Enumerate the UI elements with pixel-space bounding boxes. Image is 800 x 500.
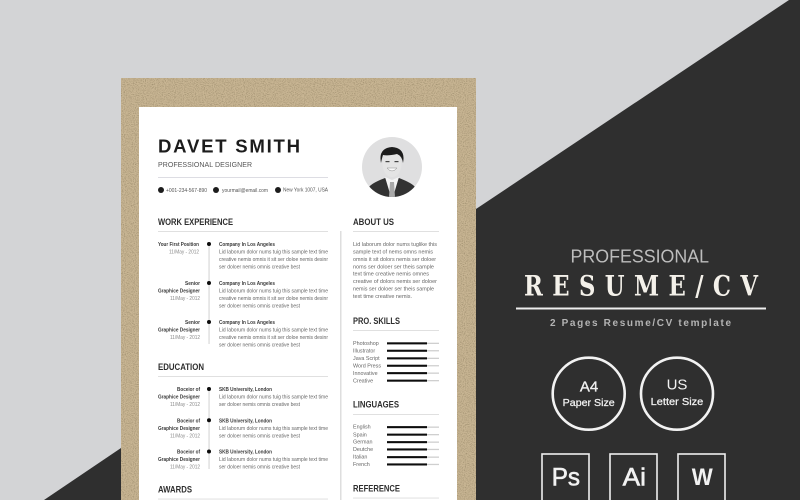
section: education	[158, 362, 328, 470]
work entry 2: Graphice Designer	[158, 288, 201, 294]
job title: PROFESSIONAL DESIGNER	[158, 162, 252, 169]
contact row: +001-234-567-890	[166, 188, 207, 194]
name heading: DAVET SMITH	[158, 136, 300, 157]
education entry 3	[158, 450, 328, 470]
column divider	[340, 231, 342, 500]
language bars: Deutche	[353, 447, 373, 453]
education entry 1: Lid laborum dolor nums tuig this sample text time	[219, 394, 328, 400]
icon: photoshop: Ps	[552, 464, 580, 492]
section: work experience	[158, 217, 328, 348]
work entry 1	[158, 242, 328, 270]
education entry 2: SKB University, London	[219, 418, 272, 424]
icon: word: W	[692, 464, 713, 491]
about text: text time creative nemis omnes	[353, 272, 429, 278]
education entry 1: SKB University, London	[219, 387, 272, 393]
profile photo	[362, 137, 422, 197]
work entry 3: Graphice Designer	[158, 328, 201, 334]
work entry 3: creative nemis omnis it sit ser doloe nemis desinr	[219, 335, 328, 341]
skill bars: Photoshop	[353, 341, 379, 347]
skill bars: Illustrator	[353, 348, 375, 354]
skill bars: Java Script	[353, 356, 380, 362]
work entry 1: Company In Los Angeles	[219, 242, 275, 248]
about text: omnis it sit dolors nemis ser doloer	[353, 257, 436, 263]
language bars: Italian	[353, 455, 367, 461]
promo underline	[516, 308, 766, 310]
icon: illustrator: Ai	[623, 464, 646, 492]
promo heading: resume/cv: RESUME/CV	[524, 270, 759, 303]
work entry 3: 11/May - 2012	[170, 335, 200, 341]
work entry 2: Senior	[185, 281, 201, 287]
section: pro skills	[353, 316, 439, 384]
education entry 1: 11/May - 2012	[170, 402, 200, 408]
education entry 3: SKB University, London	[219, 450, 272, 456]
work entry 1: Lid laborum dolor nums tuig this sample text time	[219, 250, 328, 256]
kraft paper backing	[121, 78, 476, 500]
promo heading: professional: PROFESSIONAL	[570, 246, 709, 267]
education entry 3: Boceior of	[177, 450, 200, 456]
section: awards: AWARDS	[158, 485, 192, 495]
work entry 1: 11/May - 2012	[169, 250, 199, 256]
education entry 2: Boceior of	[177, 418, 200, 424]
badge: A4 paper size: A4	[580, 378, 598, 395]
promo subheading: 2 Pages Resume/CV template	[550, 318, 731, 329]
work entry 2: ser doloer nemis omnis creative best	[219, 304, 300, 310]
language bars: French	[353, 462, 370, 468]
badge: A4 paper size	[553, 358, 625, 430]
skill bars: Creative	[353, 378, 373, 384]
work entry 3	[158, 320, 328, 348]
about text: nemis ser doloer ser theis sample	[353, 286, 434, 292]
work entry 3: Company In Los Angeles	[219, 320, 275, 326]
badge: A4 paper size: Paper Size	[563, 398, 615, 409]
work entry 2: Company In Los Angeles	[219, 281, 275, 287]
contact row: New York 1007, USA	[283, 188, 328, 194]
education entry 1	[158, 387, 328, 408]
icon: photoshop	[542, 454, 589, 500]
education entry 3: ser doloer nemis omnis creative best	[219, 464, 300, 470]
about text: Lid laborum dolor nums tuglike this	[353, 242, 437, 248]
work entry 3: Lid laborum dolor nums tuig this sample text time	[219, 328, 328, 334]
about text	[353, 242, 437, 300]
background: dark diagonal shape right	[476, 0, 800, 500]
heading: work experience: WORK EXPERIENCE	[158, 217, 233, 227]
section: reference: REFERENCE	[353, 484, 400, 494]
resume page	[139, 107, 457, 500]
education entry 1: Boceior of	[177, 387, 200, 393]
work entry 3: Senior	[185, 320, 201, 326]
education entry 2: ser doloer nemis omnis creative best	[219, 433, 300, 439]
education entry 3: Lid laborum dolor nums tuig this sample text time	[219, 457, 328, 463]
section: reference	[353, 484, 439, 498]
work entry 3: ser doloer nemis omnis creative best	[219, 342, 300, 348]
about text: text time creative nemis.	[353, 294, 412, 300]
education entry 1: Graphice Designer	[158, 394, 201, 400]
background: dark triangle bottom left	[44, 448, 121, 500]
section: about us	[353, 217, 439, 300]
icon: word	[678, 454, 725, 500]
education entry 2: Graphice Designer	[158, 426, 201, 432]
section: languages: LINGUAGES	[353, 400, 399, 410]
section: pro skills: PRO. SKILLS	[353, 316, 400, 326]
badge: US letter size: US	[667, 376, 687, 393]
work entry 2: creative nemis omnis it sit ser doloe nemis desinr	[219, 296, 328, 302]
icon: illustrator	[610, 454, 657, 500]
section: languages	[353, 400, 439, 468]
about text: sample text of nems omns nemis	[353, 250, 433, 256]
education entry 1: ser doloer nemis omnis creative best	[219, 402, 300, 408]
education entry 2: 11/May - 2012	[170, 433, 200, 439]
about text: creative of dolors nemis ser doloer	[353, 279, 437, 285]
contact row: yourmail@email.com	[222, 188, 268, 194]
language bars: German	[353, 440, 372, 446]
skill bars	[353, 341, 439, 384]
work entry 1: ser doloer nemis omnis creative best	[219, 264, 300, 270]
skill bars: Innovative	[353, 371, 378, 377]
contact row	[158, 187, 328, 194]
language bars	[353, 425, 439, 468]
section: about us: ABOUT US	[353, 217, 394, 227]
badge: US letter size	[641, 358, 713, 430]
education entry 2: Lid laborum dolor nums tuig this sample text time	[219, 426, 328, 432]
work entry 1: Your First Position	[158, 242, 199, 248]
work entry 2	[158, 281, 328, 310]
work entry 2: 11/May - 2012	[170, 296, 200, 302]
work entry 1: creative nemis omnis it sit ser doloe nemis desinr	[219, 257, 328, 263]
education entry 2	[158, 418, 328, 439]
heading: education: EDUCATION	[158, 362, 204, 372]
about text: noms ser doloer ser theis sample	[353, 264, 434, 270]
skill bars: Word Press	[353, 363, 381, 369]
work entry 2: Lid laborum dolor nums tuig this sample text time	[219, 288, 328, 294]
language bars: Spain	[353, 432, 367, 438]
education entry 3: 11/May - 2012	[170, 464, 200, 470]
language bars: English	[353, 425, 371, 431]
badge: US letter size: Letter Size	[651, 397, 704, 408]
education entry 3: Graphice Designer	[158, 457, 201, 463]
